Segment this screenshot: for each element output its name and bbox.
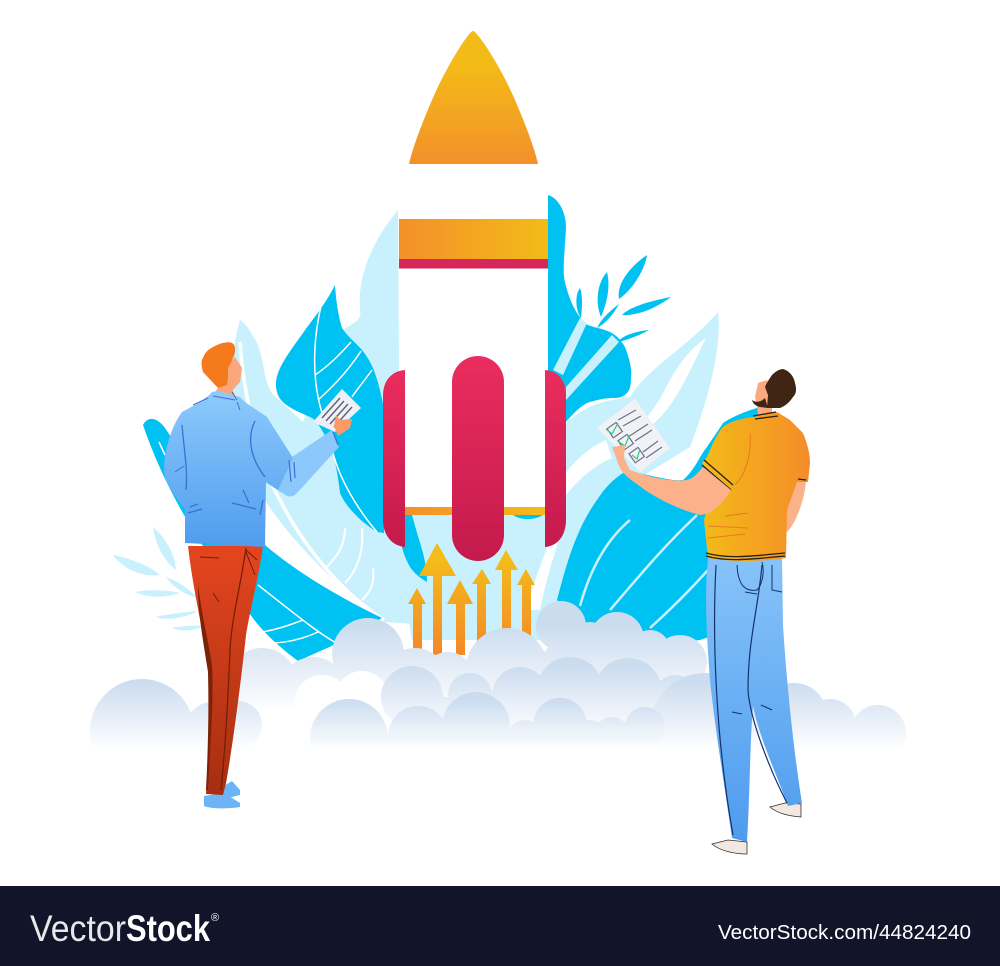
rocket body xyxy=(399,164,548,507)
small cyan mark under bar xyxy=(513,515,543,519)
pale area below rocket xyxy=(403,515,550,640)
centre fin xyxy=(452,356,504,561)
hair xyxy=(765,369,796,408)
front shoe xyxy=(204,793,240,808)
trousers xyxy=(188,546,263,795)
white puffs xyxy=(294,671,388,745)
footer banner xyxy=(0,886,1000,966)
left sprig of pale leaves xyxy=(113,527,204,630)
hair xyxy=(202,342,235,388)
right pale leaf xyxy=(500,312,719,640)
paper checklist xyxy=(597,399,670,472)
image id text: VectorStock.com/44824240 xyxy=(718,922,971,944)
rocket base bar xyxy=(405,507,545,515)
person left: man in blue shirt xyxy=(164,342,361,808)
left pale leaf xyxy=(233,210,428,625)
front cloud layer xyxy=(310,692,665,777)
hand xyxy=(334,415,352,436)
right fin xyxy=(545,370,566,547)
rocket xyxy=(383,31,566,640)
neck and face xyxy=(212,357,242,400)
outer cloud banks xyxy=(90,673,906,783)
rocket nose cone xyxy=(409,31,538,164)
blue shirt xyxy=(164,391,338,547)
left fin xyxy=(383,370,405,547)
face and neck xyxy=(755,380,772,417)
right upper cyan leaf xyxy=(546,195,631,440)
right sprig of cyan leaves xyxy=(576,255,671,342)
thrust arrows xyxy=(408,543,535,655)
paper xyxy=(313,389,361,432)
clouds xyxy=(90,601,906,783)
beard xyxy=(752,398,768,408)
back shoe xyxy=(222,781,240,799)
right lower cyan leaf xyxy=(557,407,760,650)
jeans xyxy=(706,558,802,842)
yellow shirt xyxy=(702,412,810,561)
middle cloud layer xyxy=(381,657,695,732)
person right: man in yellow shirt xyxy=(597,369,810,854)
left upper cyan leaf xyxy=(276,285,384,533)
arm holding paper xyxy=(612,445,731,515)
back shoe xyxy=(770,803,801,817)
front shoe xyxy=(712,840,747,854)
right arm behind body xyxy=(783,478,806,532)
logo text: VectorStock xyxy=(30,908,219,949)
cyan swoosh beside fin xyxy=(402,515,427,582)
banner background xyxy=(0,886,1000,966)
rocket coloured band xyxy=(399,219,548,259)
logo text: VectorStock: ® xyxy=(211,912,219,924)
left lower cyan leaf xyxy=(143,419,382,661)
logo text: VectorStock: Stock xyxy=(126,908,210,949)
back cloud layer xyxy=(227,601,707,723)
logo text: VectorStock: Vector xyxy=(30,908,126,949)
foliage behind rocket xyxy=(113,195,760,661)
rocket red stripe xyxy=(399,259,548,268)
arm holding paper xyxy=(262,430,339,497)
